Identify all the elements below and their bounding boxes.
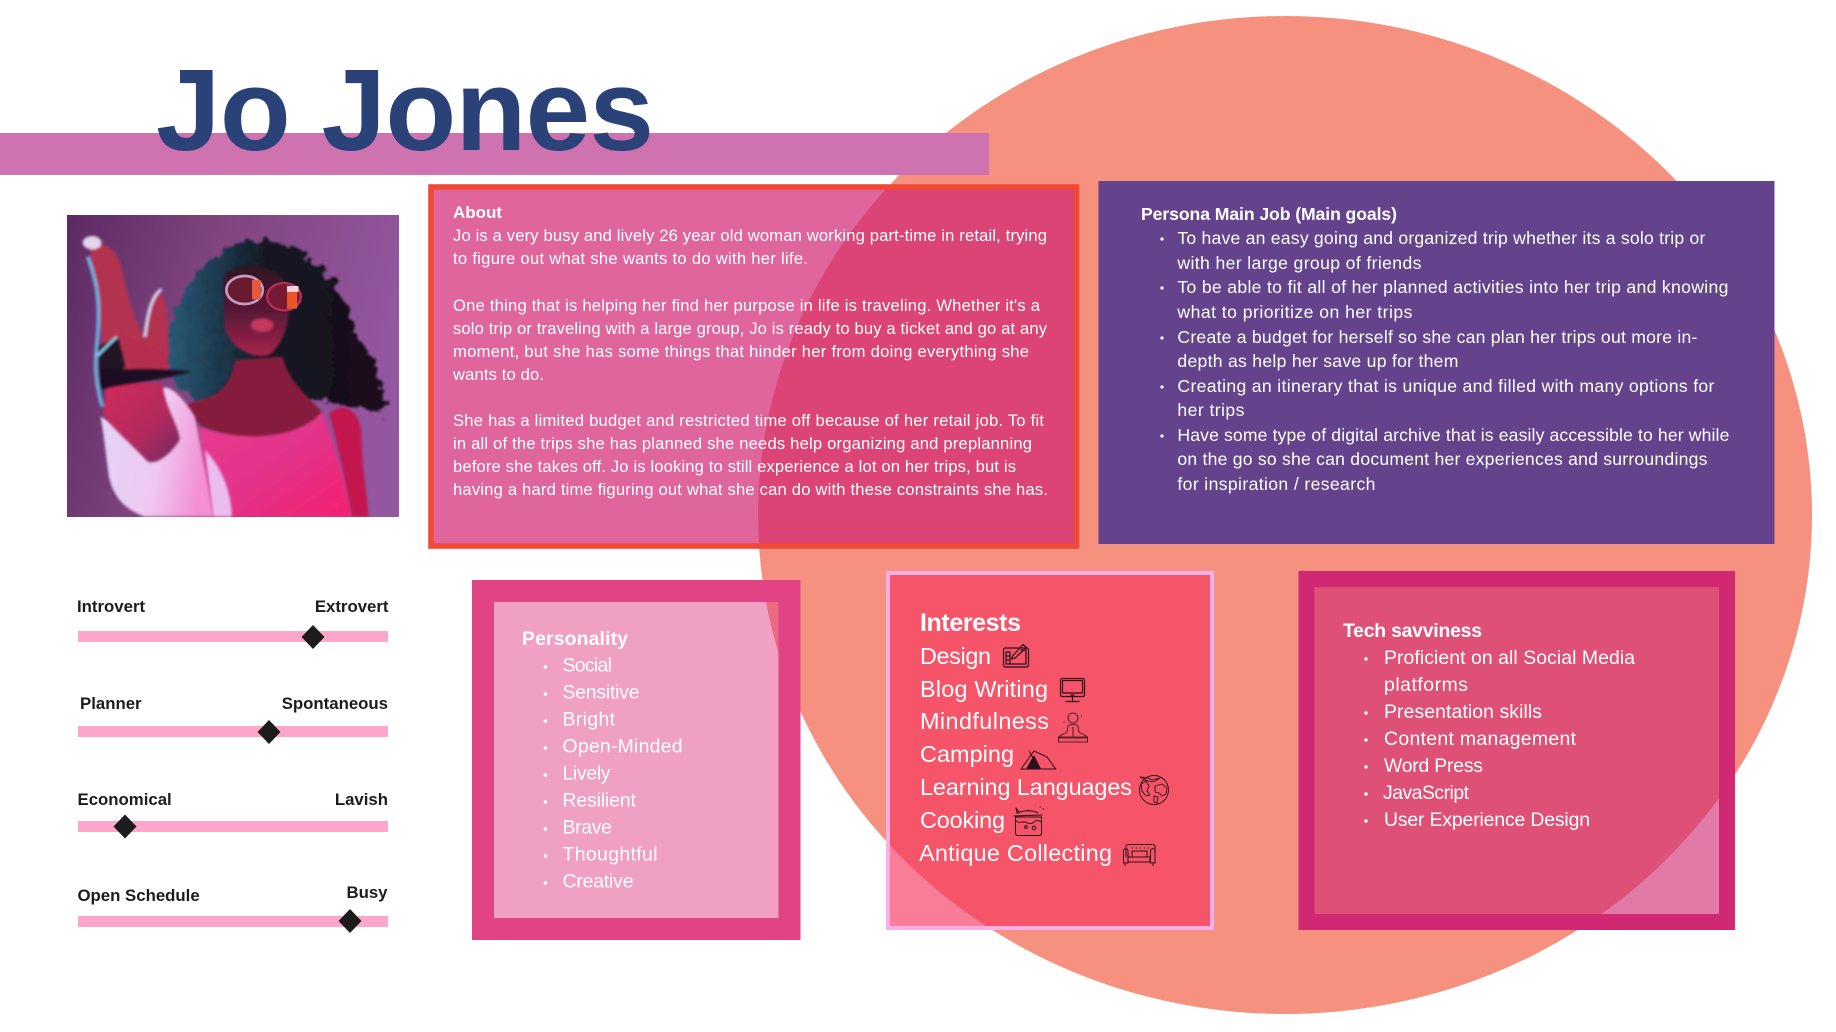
title: Jo Jones: [156, 45, 654, 175]
personality list: Lively: [562, 762, 611, 784]
about body text: solo trip or traveling with a large group, Jo is ready to buy a ticket and go at any: [453, 319, 1048, 338]
about body text: [452, 226, 1048, 499]
persona heading: Persona Main Job (Main goals): [1141, 204, 1397, 224]
header bar: [0, 133, 989, 175]
slider: economical to lavish: Lavish: [335, 790, 388, 809]
icon: globe with plane: [1140, 776, 1168, 804]
about body text: moment, but she has some things that hinder her from doing everything she: [453, 342, 1029, 361]
interests list: [919, 643, 1132, 866]
goals list: for inspiration / research: [1177, 474, 1375, 494]
personality list: Resilient: [562, 790, 637, 812]
icon: antique sofa: [1124, 844, 1155, 866]
goals list: To be able to fit all of her planned activities into her trip and knowing: [1177, 277, 1728, 297]
goals list: with her large group of friends: [1176, 253, 1422, 273]
panel: about: [431, 187, 1076, 546]
slider: open schedule to busy: [78, 883, 388, 933]
goals list: [1160, 228, 1729, 494]
tech list: Presentation skills: [1384, 701, 1542, 723]
about body text: having a hard time figuring out what she can do with these constraints she has.: [453, 480, 1048, 499]
goals list: Create a budget for herself so she can plan her trips out more in-: [1177, 327, 1698, 347]
about heading: About: [453, 203, 502, 222]
interests list: Camping: [920, 741, 1014, 767]
about body text: Jo is a very busy and lively 26 year old woman working part-time in retail, trying: [453, 226, 1047, 245]
goals list: To have an easy going and organized trip whether its a solo trip or: [1177, 228, 1706, 248]
slider: introvert to extrovert: Introvert: [77, 597, 145, 616]
tech list: Proficient on all Social Media: [1384, 647, 1635, 669]
goals list: Creating an itinerary that is unique and filled with many options for: [1177, 376, 1715, 396]
personality list: Brave: [562, 816, 612, 838]
personality list: Thoughtful: [562, 844, 658, 866]
icon: meditating person: [1058, 713, 1088, 742]
about body text: wants to do.: [452, 365, 544, 384]
goals list: Have some type of digital archive that is easily accessible to her while: [1177, 425, 1729, 445]
about body text: She has a limited budget and restricted time off because of her retail job. To fit: [453, 411, 1044, 430]
goals list: depth as help her save up for them: [1177, 351, 1458, 371]
sunglasses: [226, 276, 301, 310]
tech list: User Experience Design: [1384, 809, 1590, 831]
icon: drawing tablet: [1004, 644, 1028, 667]
slider: economical to lavish: [78, 790, 388, 838]
tech list: JavaScript: [1383, 782, 1470, 804]
slider: planner to spontaneous: Planner: [80, 694, 142, 713]
interests list: Antique Collecting: [919, 840, 1112, 866]
panel: interests: [888, 573, 1212, 928]
icon: tent: [1021, 751, 1056, 769]
slider: introvert to extrovert: Extrovert: [315, 597, 389, 616]
interests list: Mindfulness: [920, 708, 1049, 734]
panel: tech savviness: [1306, 579, 1727, 922]
interests list: Cooking: [920, 807, 1005, 833]
background circle: [758, 16, 1812, 1014]
about body text: before she takes off. Jo is looking to still experience a lot on her trips, but is: [453, 457, 1016, 476]
slider: introvert to extrovert: [77, 597, 389, 649]
sliders: [77, 597, 389, 933]
interests list: Design: [920, 643, 991, 669]
interests list: Blog Writing: [920, 676, 1048, 702]
icon: cooking pot: [1014, 807, 1044, 836]
tech list: Word Press: [1384, 755, 1483, 777]
tech list: platforms: [1384, 674, 1468, 696]
panel: personality: [483, 591, 790, 929]
interests heading: Interests: [920, 609, 1021, 637]
tech heading: Tech savviness: [1343, 620, 1482, 642]
personality list: Open-Minded: [562, 736, 682, 758]
about body text: One thing that is helping her find her purpose in life is traveling. Whether it's a: [453, 296, 1041, 315]
panel: persona main job: [1098, 181, 1774, 544]
icon: computer monitor: [1060, 678, 1084, 702]
about body text: in all of the trips she has planned she needs help organizing and preplanning: [453, 434, 1032, 453]
slider: open schedule to busy: Open Schedule: [78, 886, 200, 905]
goals list: on the go so she can document her experiences and surroundings: [1177, 449, 1708, 469]
tech list: [1364, 647, 1635, 831]
goals list: what to prioritize on her trips: [1176, 302, 1413, 322]
slider: planner to spontaneous: Spontaneous: [282, 694, 388, 713]
interests list: Learning Languages: [920, 774, 1132, 800]
slider: planner to spontaneous: [78, 694, 388, 744]
personality list: Social: [562, 654, 612, 676]
about body text: to figure out what she wants to do with her life.: [453, 249, 808, 268]
personality heading: Personality: [522, 628, 628, 650]
tech list: Content management: [1384, 728, 1577, 750]
personality list: Bright: [562, 708, 616, 730]
slider: open schedule to busy: Busy: [346, 883, 388, 902]
personality list: [544, 654, 682, 892]
slider: economical to lavish: Economical: [78, 790, 172, 809]
goals list: her trips: [1177, 400, 1245, 420]
photo of Jo: [67, 215, 399, 517]
personality list: Creative: [562, 870, 634, 892]
personality list: Sensitive: [562, 682, 640, 704]
